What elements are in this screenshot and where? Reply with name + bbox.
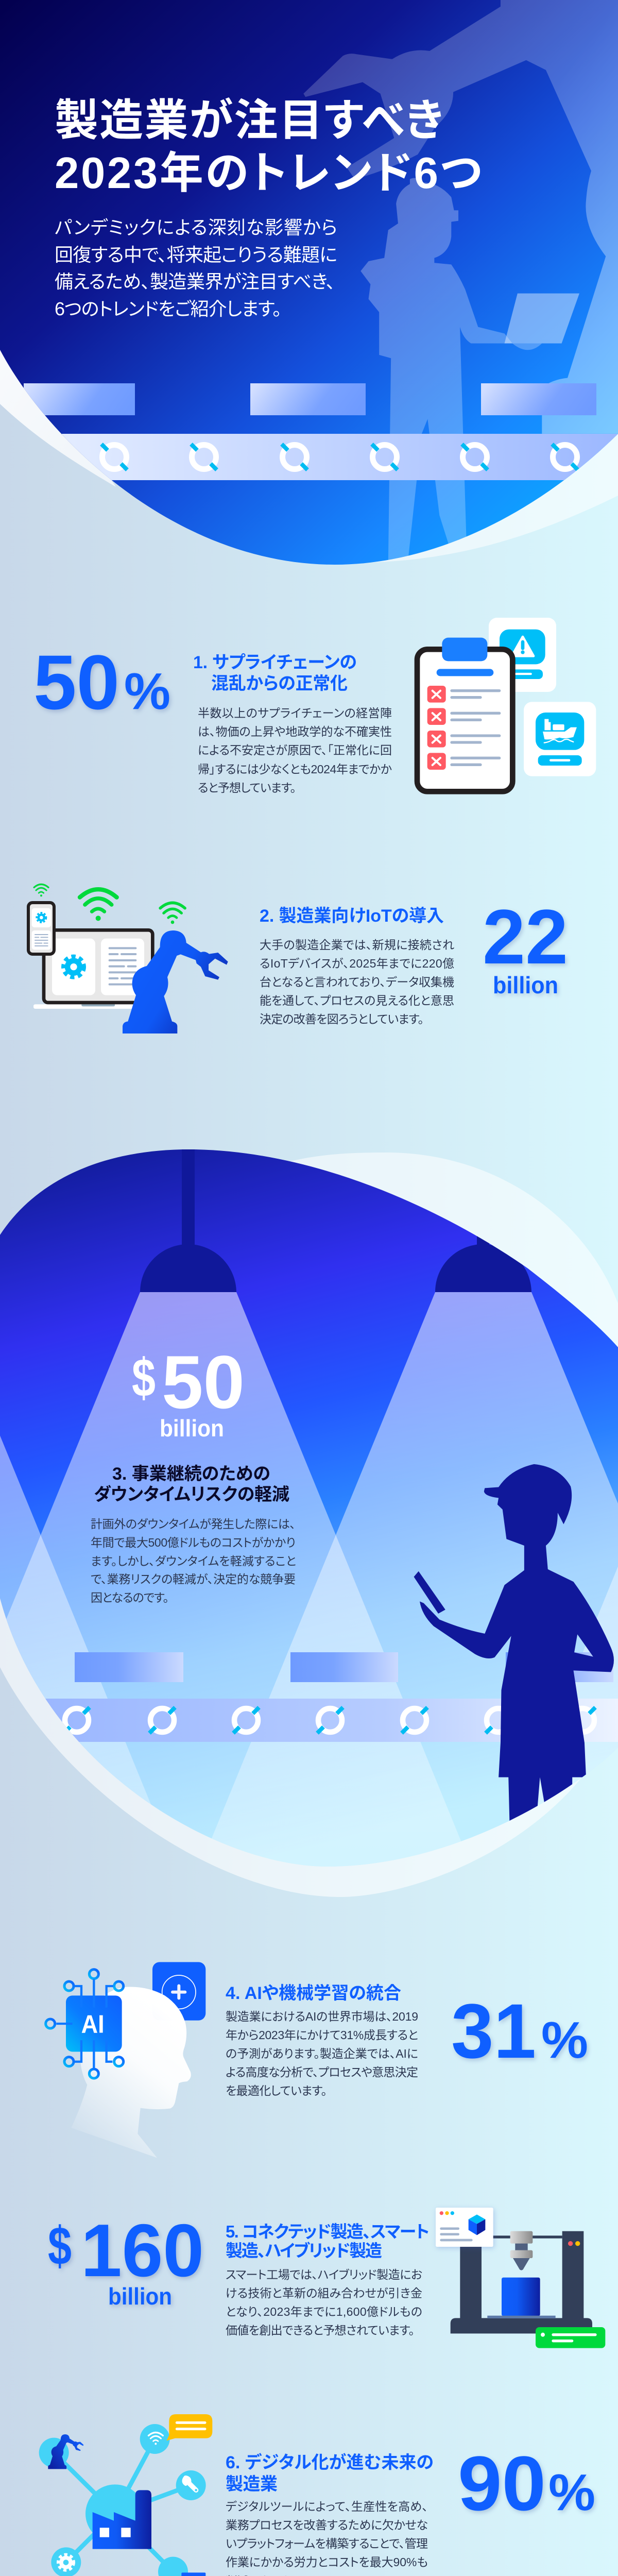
text: trend 2: 能を通して、プロセスの見える化と意思 [260, 994, 454, 1007]
text: trend 4: よる高度な分析で、プロセスや意思決定 [226, 2065, 418, 2079]
icon: connected laptop, phone and robot arm [28, 884, 228, 1033]
heading: trend 5 [226, 2222, 430, 2260]
title [55, 96, 482, 198]
panel: hero [0, 0, 618, 567]
phone [28, 903, 54, 954]
silhouette: laptop [505, 294, 579, 344]
stat: $160 billion: billion [108, 2283, 172, 2310]
card: ship [524, 702, 596, 776]
printed object [487, 2278, 556, 2318]
icon: wifi node [148, 2432, 163, 2445]
text: trend 3: 因となるのです。 [91, 1591, 169, 1604]
conveyor item 3 [481, 383, 596, 415]
icon: wifi medium [160, 903, 185, 924]
scene background [0, 1133, 618, 1870]
AI chip: AI [81, 2010, 105, 2038]
stat: 50% [33, 639, 170, 725]
heading: trend 6: 製造業 [226, 2475, 278, 2494]
section band: dome bottom [0, 1597, 583, 1897]
card: model preview [436, 2208, 493, 2247]
AI chip [66, 1995, 122, 2052]
light beams [0, 1292, 618, 1906]
lamp 2 [435, 1133, 531, 1292]
conveyor belt [31, 1699, 618, 1742]
text: trend 6: デジタルツールによって、生産性を高め、 [226, 2500, 428, 2513]
stat: $160 billion: $ [48, 2216, 72, 2276]
intro text: 回復する中で、将来起こりうる難題に [55, 244, 337, 265]
text: trend 2: 台となると言われており、データ収集機 [260, 975, 454, 989]
network nodes [39, 2424, 206, 2576]
text: trend 2 [260, 938, 454, 1026]
stat: 22 billion: billion [493, 972, 558, 998]
text: trend 1: は、物価の上昇や地政学的な不確実性 [198, 725, 392, 738]
conveyor belt [62, 434, 618, 480]
print head [510, 2231, 533, 2270]
clipboard [417, 638, 512, 791]
stat: 31% [451, 1988, 588, 2074]
text: trend 5: となり、2023年までに1,600億ドルもの [226, 2305, 422, 2318]
conveyor item 2 [290, 1652, 398, 1682]
laptop [33, 930, 152, 1009]
text: trend 3: で、業務リスクの軽減が、決定的な競争要 [91, 1572, 296, 1586]
head silhouette [71, 1987, 191, 2158]
hero band: left crescent [0, 309, 116, 487]
text: trend 6: 業務プロセスを改善するために欠かせな [226, 2518, 428, 2532]
text: trend 6 [226, 2500, 428, 2576]
text: trend 3 [91, 1517, 296, 1604]
text: trend 2: るIoTデバイスが、2025年までに220億 [260, 957, 454, 970]
stat: $50 billion: $ [132, 1348, 156, 1408]
heading: trend 2: 2. 製造業向けIoTの導入 [260, 906, 444, 926]
heading: trend 3: ダウンタイムリスクの軽減 [94, 1484, 289, 1504]
stat: 31%: 31 [451, 1988, 536, 2074]
stat: $50 billion [132, 1340, 245, 1442]
stat: $50 billion: billion [160, 1415, 224, 1442]
silhouette: robot arm [303, 0, 618, 434]
hero background [0, 0, 618, 567]
lamp 1 [140, 1149, 236, 1292]
text: trend 4 [226, 2010, 418, 2097]
mini robot arm [48, 2434, 83, 2469]
stat: $160 billion: 160 [81, 2209, 204, 2292]
heading: trend 1: 1. サプライチェーンの [193, 653, 357, 672]
icon: clipboard with alert cards [417, 618, 596, 791]
text: trend 2: 決定の改善を図ろうとしています。 [260, 1012, 424, 1026]
text: trend 5: スマート工場では、ハイブリッド製造にお [226, 2268, 422, 2281]
title: 製造業が注目すべき [55, 96, 443, 145]
heading: trend 3: 3. 事業継続のための [112, 1464, 270, 1484]
heading: trend 1 [193, 653, 357, 693]
chat bubble [166, 2414, 212, 2441]
card: status [536, 2327, 605, 2348]
heading: trend 6: 6. デジタル化が進む未来の [226, 2452, 434, 2472]
stat: 50%: 50 [33, 639, 119, 725]
text: trend 4: 年から2023年にかけて31%成長すると [226, 2028, 418, 2042]
heading: trend 4: 4. AIや機械学習の統合 [226, 1984, 401, 2003]
card: warning [489, 618, 556, 692]
text: trend 4: を最適化しています。 [226, 2084, 327, 2097]
stat: 90%: 90 [458, 2440, 546, 2527]
section band: dome right [288, 1153, 618, 1391]
text: trend 1 [198, 706, 392, 794]
icon: wifi large [80, 889, 117, 921]
circuit traces [46, 1970, 124, 2078]
hero band: right crescent [360, 412, 618, 563]
conveyor item 3 [506, 1652, 613, 1682]
truck [163, 2572, 207, 2576]
icon: wifi small [34, 884, 48, 896]
icon: 3D printer [436, 2208, 605, 2348]
icon: AI head [46, 1962, 205, 2158]
text: trend 4: の予測があります。製造企業では、AIに [226, 2047, 418, 2060]
text: trend 5: ける技術と革新の組み合わせが引き金 [226, 2286, 422, 2300]
icon: digital factory network [39, 2414, 212, 2576]
intro text: 備えるため、製造業界が注目すべき、 [55, 271, 335, 292]
stat: 50%: % [124, 663, 170, 720]
text: trend 3: 年間で最大500億ドルものコストがかかり [91, 1536, 296, 1549]
circuit lines [56, 1979, 113, 2068]
text: trend 1: ると予想しています。 [198, 781, 296, 794]
text: trend 1: 半数以上のサプライチェーンの経営陣 [198, 706, 392, 720]
heading: trend 1: 混乱からの正常化 [211, 674, 348, 693]
text: trend 5: 価値を創出できると予想されています。 [226, 2324, 415, 2337]
heading: trend 5: 5. コネクテッド製造、スマート [226, 2222, 430, 2241]
icon: gear node [58, 2555, 74, 2570]
robot arm [123, 930, 228, 1033]
icon: wrench [184, 2477, 197, 2491]
title: 2023年のトレンド6つ [55, 149, 482, 198]
plus tile [152, 1962, 205, 2021]
text: trend 5 [226, 2268, 422, 2337]
conveyor item 1 [75, 1652, 183, 1682]
text: trend 4: 製造業におけるAIの世界市場は、2019 [226, 2010, 418, 2023]
heading: trend 5: 製造、ハイブリッド製造 [226, 2241, 382, 2260]
intro text: パンデミックによる深刻な影響から [55, 217, 337, 238]
stat: 90% [458, 2440, 595, 2527]
text: trend 1: による不安定さが原因で、「正常化に回 [198, 743, 392, 757]
text: trend 3: 計画外のダウンタイムが発生した際には、 [91, 1517, 296, 1531]
panel: downtime scene [0, 1133, 618, 1906]
text: trend 1: 帰」するには少なくとも2024年までかか [198, 762, 392, 776]
stat: 90%: % [548, 2464, 595, 2521]
stat: 22 billion: 22 [483, 893, 568, 980]
factory [93, 2490, 151, 2549]
printer frame [451, 2231, 592, 2333]
stat: $50 billion: 50 [162, 1340, 245, 1424]
intro text [55, 217, 337, 319]
text: trend 6: 作業にかかる労力とコストを最大90%も [226, 2555, 428, 2569]
heading: trend 6 [226, 2452, 434, 2494]
conveyor item 1 [24, 383, 135, 415]
silhouette: worker with tablet [414, 1464, 614, 1825]
stat: 31%: % [541, 2011, 588, 2069]
conveyor item 2 [250, 383, 366, 415]
network spokes [54, 2439, 191, 2572]
silhouette: engineer with laptop [360, 178, 542, 561]
stat: $160 billion [48, 2209, 204, 2310]
intro text: 6つのトレンドをご紹介します。 [55, 298, 282, 319]
text: trend 3: ます。しかし、ダウンタイムを軽減すること [91, 1554, 296, 1568]
heading: trend 3 [94, 1464, 289, 1504]
text: trend 6: いプラットフォームを構築することで、管理 [226, 2537, 428, 2550]
text: trend 2: 大手の製造企業では、新規に接続され [260, 938, 454, 952]
